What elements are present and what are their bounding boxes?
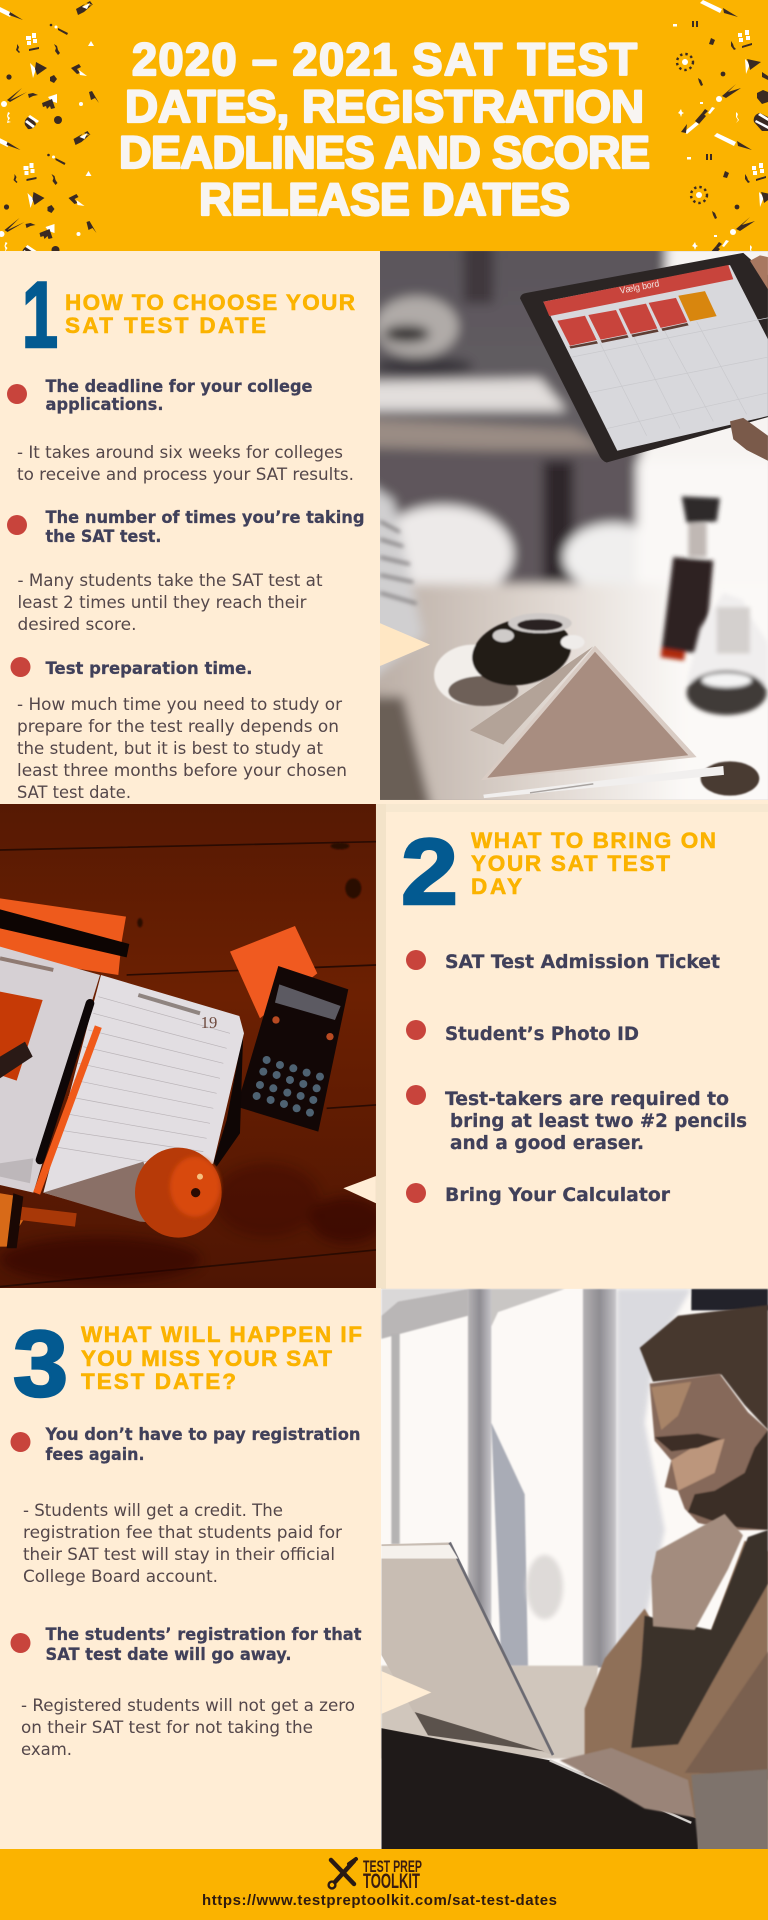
point: registration goes away: SAT test date will go away. — [46, 1645, 292, 1665]
body: preparation: - How much time you need to study or — [17, 695, 342, 715]
man: hand at chin — [651, 1514, 743, 1630]
panel 1: how to choose your SAT test date — [0, 251, 380, 805]
body: preparation: the student, but it is best to study at — [17, 739, 323, 759]
body: credit: their SAT test will stay in their official — [23, 1545, 335, 1565]
man: shirt — [631, 1530, 768, 1748]
coffee cup and saucer — [434, 610, 585, 706]
bullet — [10, 657, 30, 677]
heading 2: WHAT TO BRING ON — [471, 828, 716, 853]
footer banner — [0, 1849, 768, 1920]
item: pencils and eraser: bring at least two #2 pencils — [450, 1110, 747, 1132]
body: credit: registration fee that students paid for — [23, 1523, 342, 1543]
open notebook — [0, 947, 244, 1223]
item: calculator: Bring Your Calculator — [445, 1184, 671, 1206]
logo icon: crossed tools — [329, 1859, 356, 1888]
number 2: 2 — [401, 819, 458, 924]
laptop lid — [381, 1542, 553, 1755]
callout pointer — [343, 1176, 376, 1203]
number 3: 3 — [13, 1311, 68, 1416]
confetti right — [673, 0, 768, 267]
item: pencils and eraser — [445, 1088, 747, 1154]
body: deadline: to receive and process your SAT results. — [17, 465, 354, 485]
photo: tablet on cafe table — [380, 251, 768, 800]
photo: man thinking at laptop — [378, 1280, 768, 1866]
body: credit: - Students will get a credit. The — [23, 1501, 283, 1521]
heading 3: WHAT WILL HAPPEN IF — [81, 1322, 362, 1347]
heading 3: YOU MISS YOUR SAT — [81, 1346, 332, 1371]
point: registration fees: fees again. — [46, 1445, 144, 1465]
orange fruit — [135, 1148, 222, 1238]
logo wordmark: TEST PREP — [363, 1857, 422, 1876]
lower props — [0, 1193, 77, 1248]
bullet — [406, 1085, 426, 1105]
point: preparation: Test preparation time. — [46, 659, 252, 679]
pen — [483, 761, 759, 798]
item: pencils and eraser: and a good eraser. — [450, 1132, 644, 1154]
heading 2 — [471, 828, 716, 899]
body: number of times: least 2 times until they reach their — [18, 593, 306, 613]
bullet — [7, 515, 27, 535]
heading 3 — [81, 1322, 362, 1394]
man: sleeve — [692, 1769, 768, 1849]
bullet — [7, 384, 27, 404]
window frame — [381, 1289, 768, 1759]
point: registration fees: You don’t have to pay registration — [45, 1425, 361, 1445]
heading 2: DAY — [471, 874, 522, 899]
tablet — [520, 253, 768, 462]
body: no zero — [21, 1696, 355, 1760]
date number: 19 — [201, 1013, 217, 1032]
body: number of times: - Many students take the SAT test at — [18, 571, 323, 591]
number 1: 1 — [22, 262, 58, 367]
sticky note — [230, 926, 317, 1018]
heading 1: HOW TO CHOOSE YOUR — [65, 290, 355, 315]
point: number of times: the SAT test. — [46, 527, 162, 547]
body: preparation: prepare for the test really depends on — [17, 717, 339, 737]
logo wordmark — [363, 1857, 422, 1893]
title: DATES, REGISTRATION — [125, 81, 644, 132]
man: hair — [640, 1305, 768, 1430]
callout pointer — [380, 623, 430, 666]
bullet — [10, 1633, 30, 1653]
panel 2: what to bring on your SAT test day — [376, 804, 768, 1289]
title: 2020 – 2021 SAT TEST — [132, 34, 637, 85]
point: registration goes away: The students’ registration for that — [46, 1625, 362, 1645]
body: credit — [23, 1501, 342, 1587]
USB stick — [0, 1042, 33, 1078]
body: number of times — [18, 571, 323, 635]
point: number of times — [46, 508, 364, 547]
header banner — [0, 0, 768, 267]
heading 3: TEST DATE? — [81, 1369, 236, 1394]
title: DEADLINES AND SCORE — [119, 127, 650, 178]
orange pencil — [37, 1027, 98, 1193]
calculator — [237, 966, 348, 1132]
title — [119, 34, 650, 225]
glass jar — [687, 593, 768, 715]
heading 1: SAT TEST DATE — [65, 313, 266, 338]
item: pencils and eraser: Test-takers are required to — [445, 1088, 729, 1110]
folded card — [470, 646, 697, 780]
point: registration fees — [45, 1425, 361, 1465]
body: preparation — [17, 695, 347, 803]
logo wordmark: TOOLKIT — [363, 1870, 420, 1893]
man: typing hand — [560, 1748, 695, 1817]
heading 2: YOUR SAT TEST — [471, 851, 670, 876]
point: deadline: applications. — [46, 395, 164, 415]
man: coat lapel — [685, 1651, 768, 1780]
body: preparation: least three months before your chosen — [17, 761, 347, 781]
title: RELEASE DATES — [199, 174, 570, 225]
tablet: Vælg bord — [619, 278, 660, 296]
body: credit: College Board account. — [23, 1567, 218, 1587]
point: registration goes away — [46, 1625, 362, 1665]
body: no zero: - Registered students will not get a zero — [21, 1696, 355, 1716]
point: number of times: The number of times you’re taking — [46, 508, 364, 528]
confetti left — [0, 1, 99, 259]
body: no zero: exam. — [21, 1740, 72, 1760]
body: number of times: desired score. — [18, 615, 136, 635]
laptop base — [381, 1728, 698, 1866]
bullet — [406, 1183, 426, 1203]
callout pointer — [381, 1671, 431, 1714]
man: coat — [585, 1541, 768, 1866]
orange folder and strap — [0, 898, 129, 975]
body: preparation: SAT test date. — [17, 783, 131, 803]
wood boards — [0, 842, 376, 1287]
url: https://www.testpreptoolkit.com/sat-test-dates — [202, 1892, 557, 1909]
photo: notebook, calculator and orange on wood — [0, 800, 383, 1290]
body: deadline — [17, 443, 354, 485]
item: photo ID: Student’s Photo ID — [445, 1023, 639, 1045]
panel 3: what will happen if you miss your SAT test date — [0, 1288, 381, 1849]
man: face — [650, 1374, 768, 1530]
pen — [40, 1003, 90, 1160]
item: admission ticket: SAT Test Admission Ticket — [445, 951, 720, 973]
bullet — [406, 1020, 426, 1040]
bullet — [406, 950, 426, 970]
point: deadline — [46, 377, 312, 415]
heading 1 — [65, 290, 355, 338]
bottle — [661, 496, 720, 661]
body: no zero: on their SAT test for not taking the — [21, 1718, 313, 1738]
orange page marker — [0, 992, 43, 1081]
body: deadline: - It takes around six weeks for colleges — [17, 443, 343, 463]
bullet — [10, 1432, 30, 1452]
point: deadline: The deadline for your college — [46, 377, 312, 397]
